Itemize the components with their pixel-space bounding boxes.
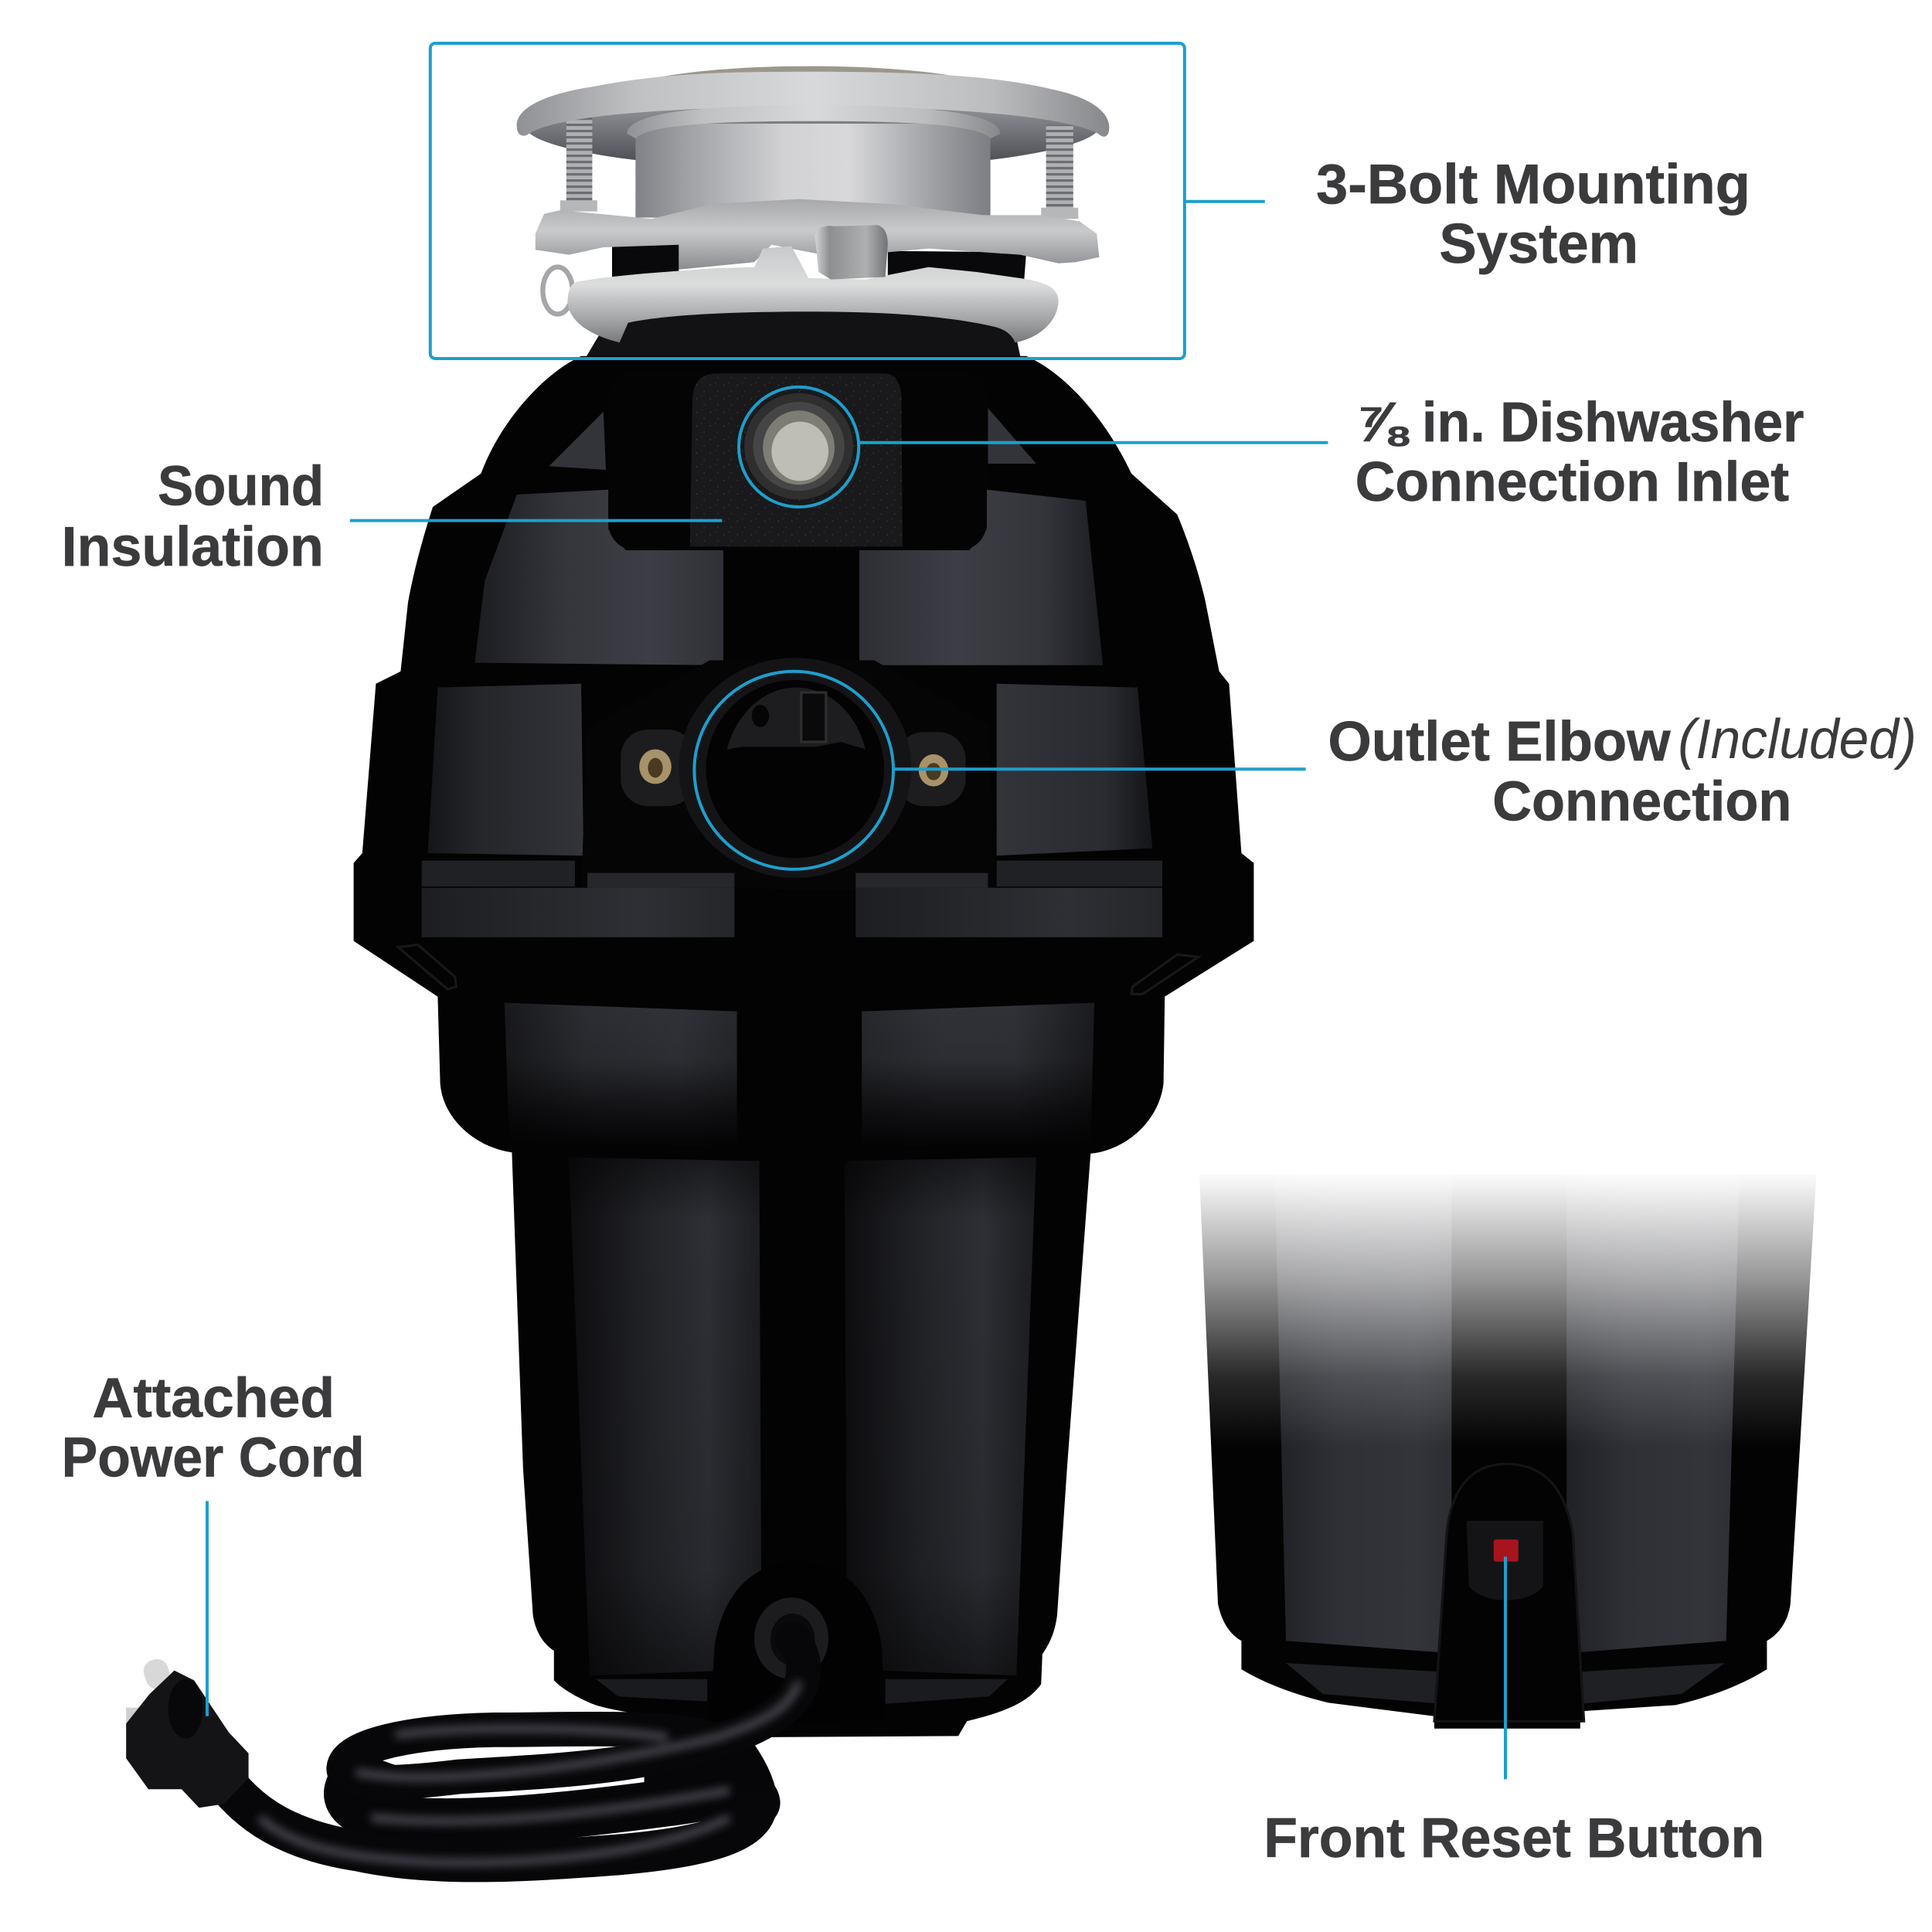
upper dome left panel	[474, 490, 723, 665]
mounting ear right	[896, 732, 966, 806]
reset button close-up inset	[1189, 1168, 1826, 1729]
right bolt	[1046, 125, 1073, 214]
disposal body silhouette	[354, 356, 1253, 1737]
grinder left panel	[569, 1158, 762, 1675]
label: attached power cord: Attached	[93, 1368, 335, 1430]
black gaps between rings	[612, 243, 1026, 284]
cord highlights	[260, 1682, 799, 1862]
locking tab	[815, 225, 888, 280]
callout: mounting box	[430, 43, 1265, 359]
outlet rim	[679, 658, 911, 878]
red reset button	[1494, 1539, 1519, 1562]
bolt nuts	[560, 200, 1078, 219]
plug face detail	[168, 1679, 202, 1739]
lower mounting ring	[567, 246, 1059, 342]
cord grommet	[754, 1597, 828, 1679]
sleeve lip	[627, 105, 1000, 138]
button housing arch	[1434, 1464, 1584, 1721]
hook loop	[543, 267, 573, 314]
mid body right panel	[862, 1003, 1094, 1146]
coil filler	[336, 1729, 777, 1795]
black collar under mount	[583, 309, 1022, 361]
label: attached power cord	[62, 1368, 365, 1488]
outlet elbow connection	[621, 658, 966, 878]
inset left panel	[1275, 1175, 1451, 1653]
inset body	[1199, 1175, 1816, 1729]
outlet hole	[706, 680, 884, 858]
label: 3-bolt mounting system: 3-Bolt Mounting	[1316, 154, 1750, 216]
mid body left panel	[505, 1003, 737, 1146]
label: dishwasher connection inlet: Connection Inlet	[1355, 451, 1789, 513]
main product: garbage disposal	[354, 66, 1253, 1737]
label: sound insulation: Insulation	[62, 516, 324, 578]
brass insert left	[639, 750, 672, 784]
callout: dishwasher inlet ring and leader	[739, 387, 1328, 507]
flange top surface	[649, 66, 971, 79]
upper dome side facets	[549, 408, 1036, 470]
label: outlet elbow connection	[1328, 709, 1917, 833]
sink sleeve cylinder	[635, 124, 991, 218]
brass insert right	[919, 754, 948, 787]
upper dome right panel	[859, 490, 1103, 665]
front cord strand to plug	[213, 1764, 757, 1862]
callout: power cord leader	[206, 1501, 208, 1716]
flange underside	[524, 80, 1100, 169]
upper mounting ring	[536, 199, 1099, 270]
flange rim	[517, 72, 1109, 137]
callout: sound insulation leader	[350, 519, 722, 522]
outlet bracket	[581, 660, 997, 892]
label: attached power cord: Power Cord	[62, 1427, 365, 1488]
button recess	[1467, 1521, 1543, 1600]
cord entry arch	[709, 1562, 886, 1723]
power cord and plug	[126, 1638, 804, 1862]
lower collar panels	[398, 861, 1198, 994]
callout: outlet ring and leader	[694, 672, 1306, 869]
inset base lip	[1286, 1663, 1725, 1704]
dishwasher inlet	[744, 393, 853, 499]
label: sound insulation: Sound	[158, 456, 324, 518]
label: front reset button: Front Reset Button	[1264, 1808, 1764, 1869]
callout: reset button leader	[1505, 1556, 1506, 1779]
label: dishwasher connection inlet: in. Dishwasher	[1422, 392, 1804, 454]
grinder right panel	[845, 1158, 1036, 1675]
outlet interior detail	[727, 688, 866, 750]
label: outlet elbow connection: Outlet Elbow	[1328, 711, 1672, 773]
plug head	[126, 1671, 229, 1789]
label: outlet elbow connection: Connection	[1492, 771, 1791, 833]
strain relief	[178, 1733, 249, 1808]
label: dishwasher connection inlet: ⅞	[1355, 392, 1410, 454]
lower coil back strand	[347, 1781, 757, 1821]
base lip panels	[596, 1679, 1008, 1704]
prong top	[141, 1656, 173, 1692]
mid band right panel	[997, 684, 1152, 855]
label: dishwasher connection inlet	[1355, 392, 1804, 513]
prong side	[126, 1708, 141, 1727]
sound insulation recess	[608, 371, 987, 550]
mounting ear left	[621, 730, 695, 806]
label: 3-bolt mounting system	[1316, 154, 1750, 275]
left bolt	[566, 113, 592, 206]
inset right panel	[1566, 1175, 1740, 1653]
mid band left panel	[428, 684, 583, 855]
foam panel	[690, 373, 903, 546]
white fade over top of inset	[1189, 1168, 1826, 1447]
label: outlet elbow connection: (Included)	[1678, 709, 1917, 770]
label: 3-bolt mounting system: System	[1439, 213, 1638, 275]
upper coil	[344, 1638, 804, 1782]
mounting assembly	[517, 66, 1109, 342]
label: sound insulation	[62, 456, 324, 578]
